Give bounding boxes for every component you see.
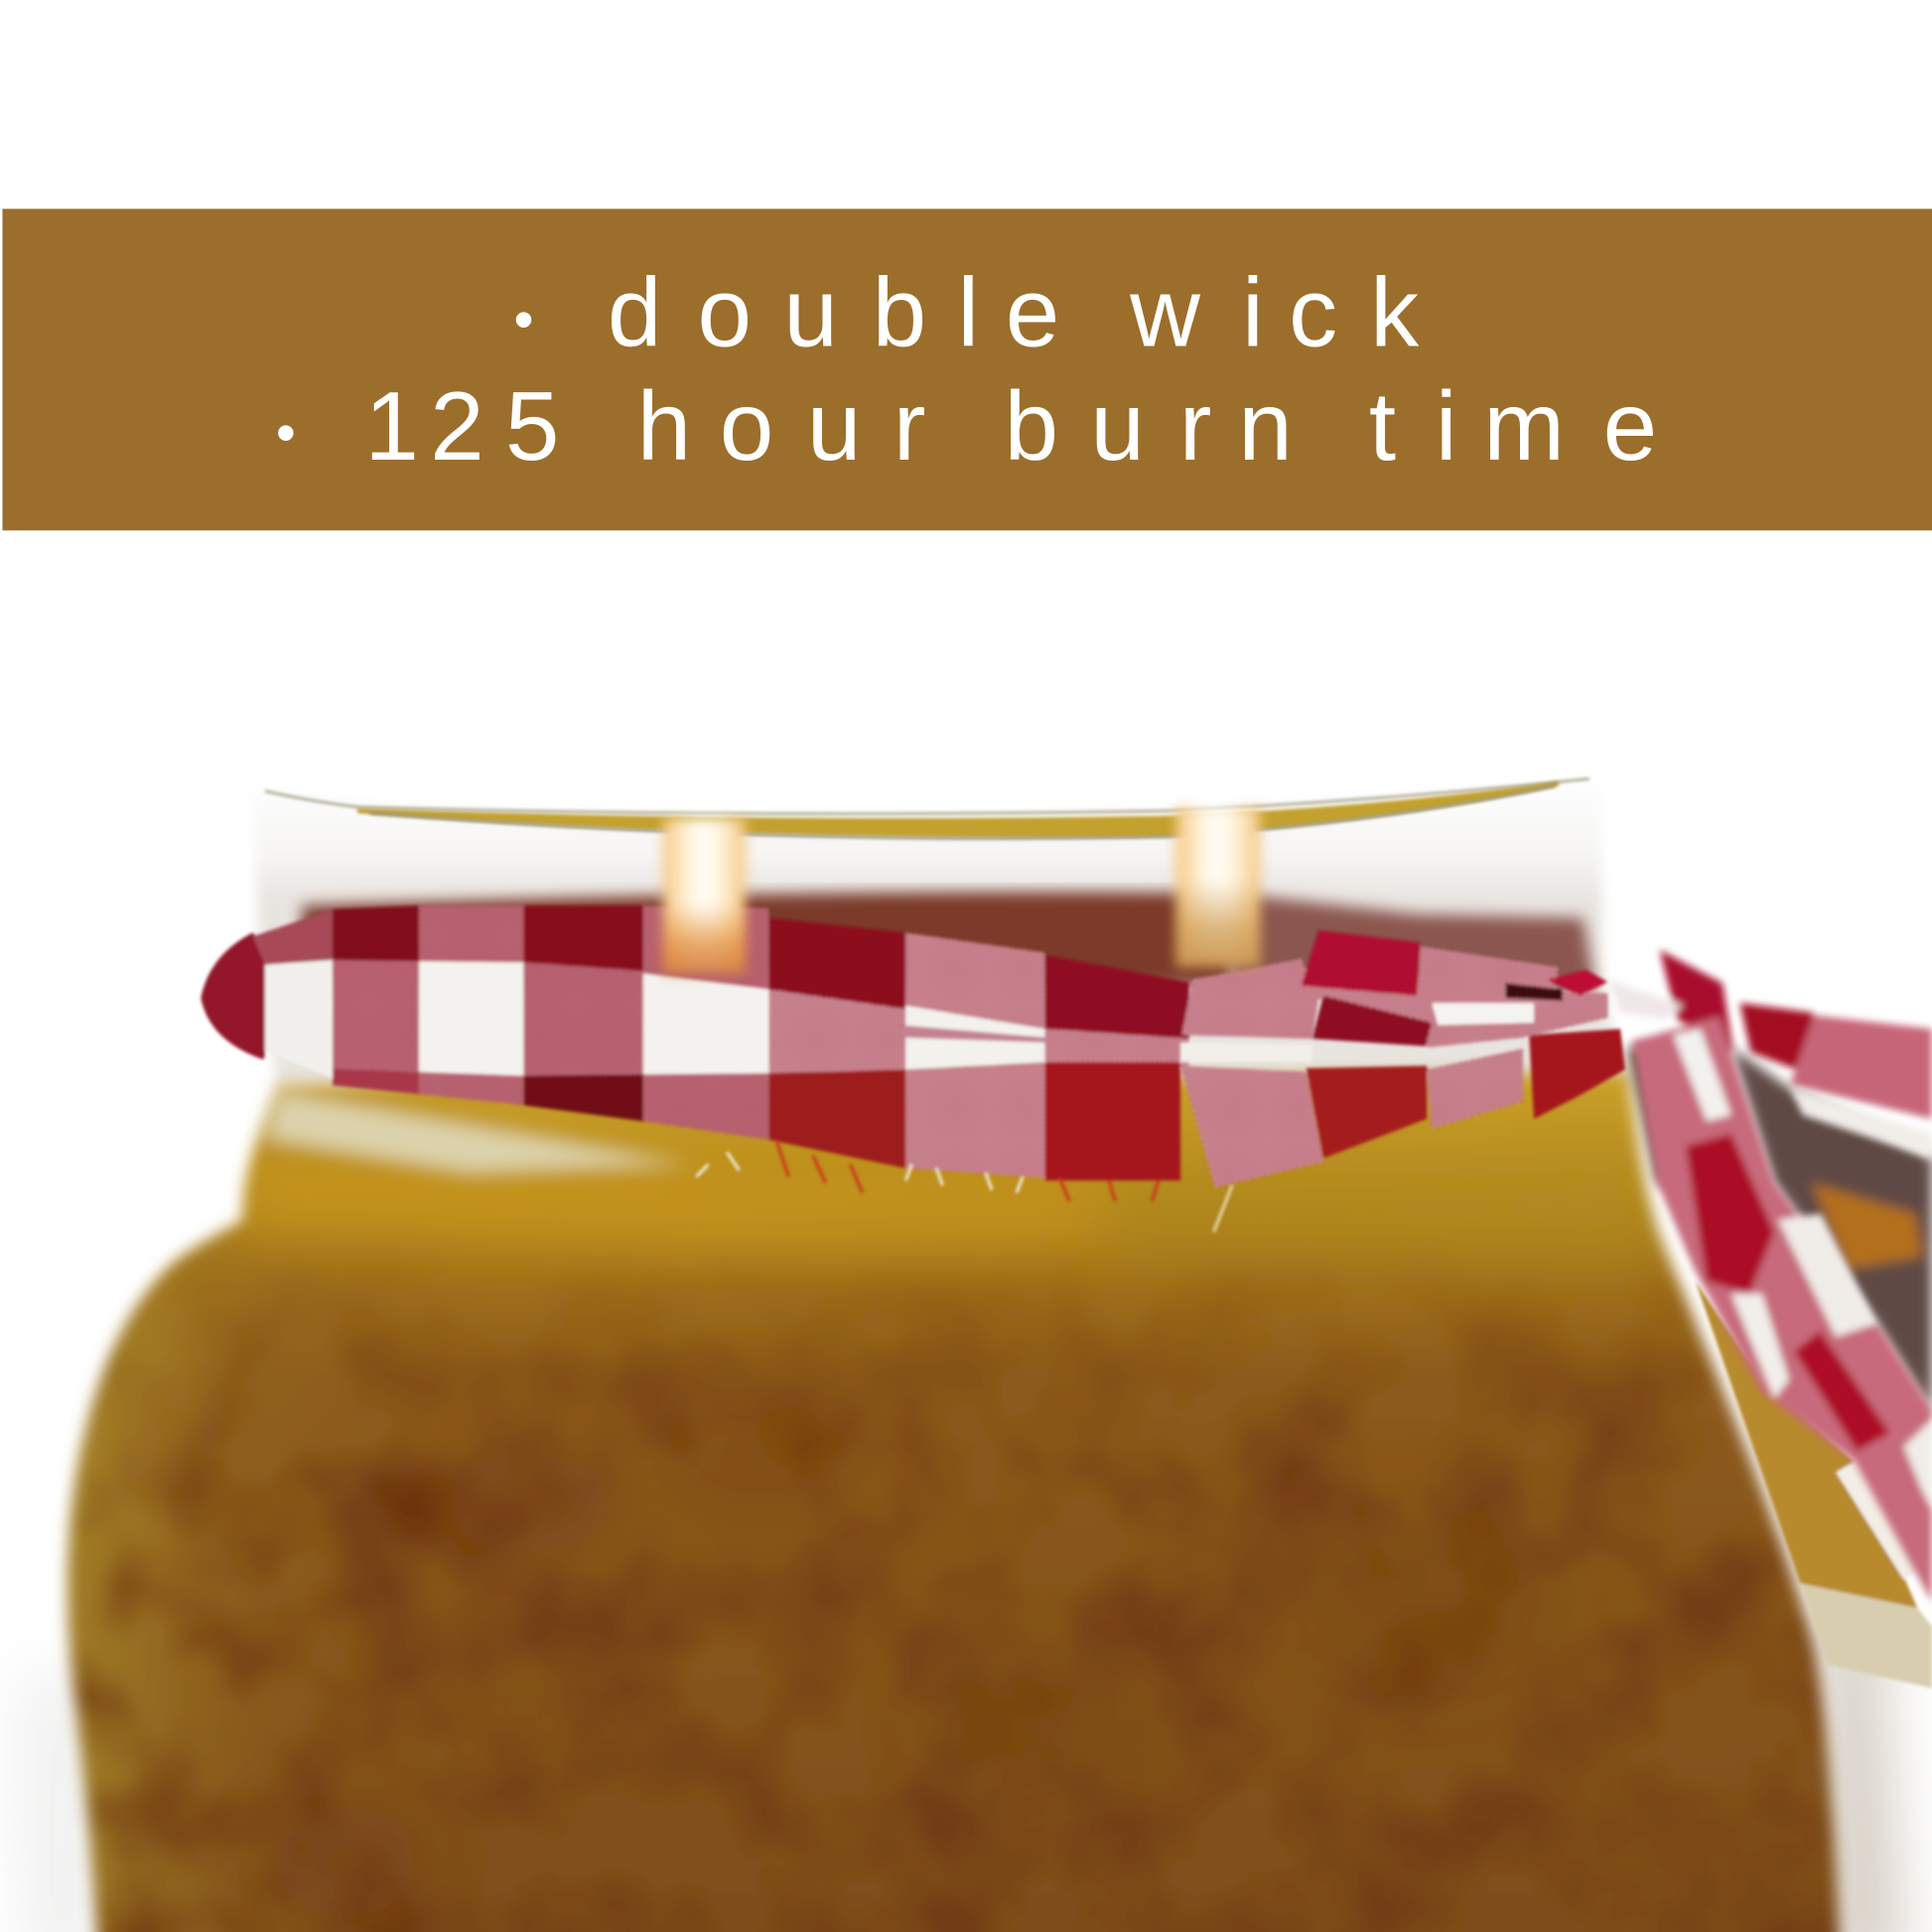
jar base glass shadow bbox=[25, 1601, 1897, 1932]
rim bbox=[357, 781, 1559, 838]
mottled texture bbox=[69, 1271, 1845, 1932]
text: double wick: double wick bbox=[608, 258, 1420, 367]
ribbon row 2 bbox=[265, 960, 1312, 1078]
dark background behind bow bbox=[1626, 1047, 1932, 1411]
flame left bbox=[663, 818, 746, 973]
ribbon row 3 bbox=[333, 1029, 1625, 1187]
wax top cream bbox=[265, 1090, 690, 1173]
ribbon tail bbox=[1632, 1017, 1932, 1601]
glass neck bbox=[252, 778, 1626, 1084]
ribbon fringe bbox=[696, 1140, 1232, 1232]
dark blotches bbox=[80, 1307, 1565, 1916]
bullet: double wick: • bbox=[513, 288, 533, 351]
candle flames bbox=[663, 807, 1261, 973]
ribbon upper fold bbox=[1181, 930, 1608, 1047]
jar wax body bbox=[0, 1059, 1932, 1932]
dark wax band behind glass bbox=[302, 892, 1232, 986]
wax yellow rim bbox=[234, 1152, 1109, 1244]
banner bbox=[2, 208, 1932, 530]
candle jar bbox=[0, 778, 1932, 1932]
ribbon row 1 bbox=[252, 905, 1189, 1038]
ribbon: bow and tail bbox=[1608, 950, 1932, 1601]
bow right loop bbox=[1660, 950, 1932, 1159]
bullet: burn time: • bbox=[276, 401, 296, 465]
ribbon left fold bbox=[201, 932, 283, 1059]
ribbon: gingham band bbox=[201, 905, 1625, 1232]
flame right bbox=[1175, 807, 1261, 967]
price tag bbox=[1696, 1282, 1932, 1688]
bow knot bbox=[1608, 980, 1683, 1019]
text: 125 hour burn time: 125 hour burn time bbox=[364, 371, 1657, 481]
